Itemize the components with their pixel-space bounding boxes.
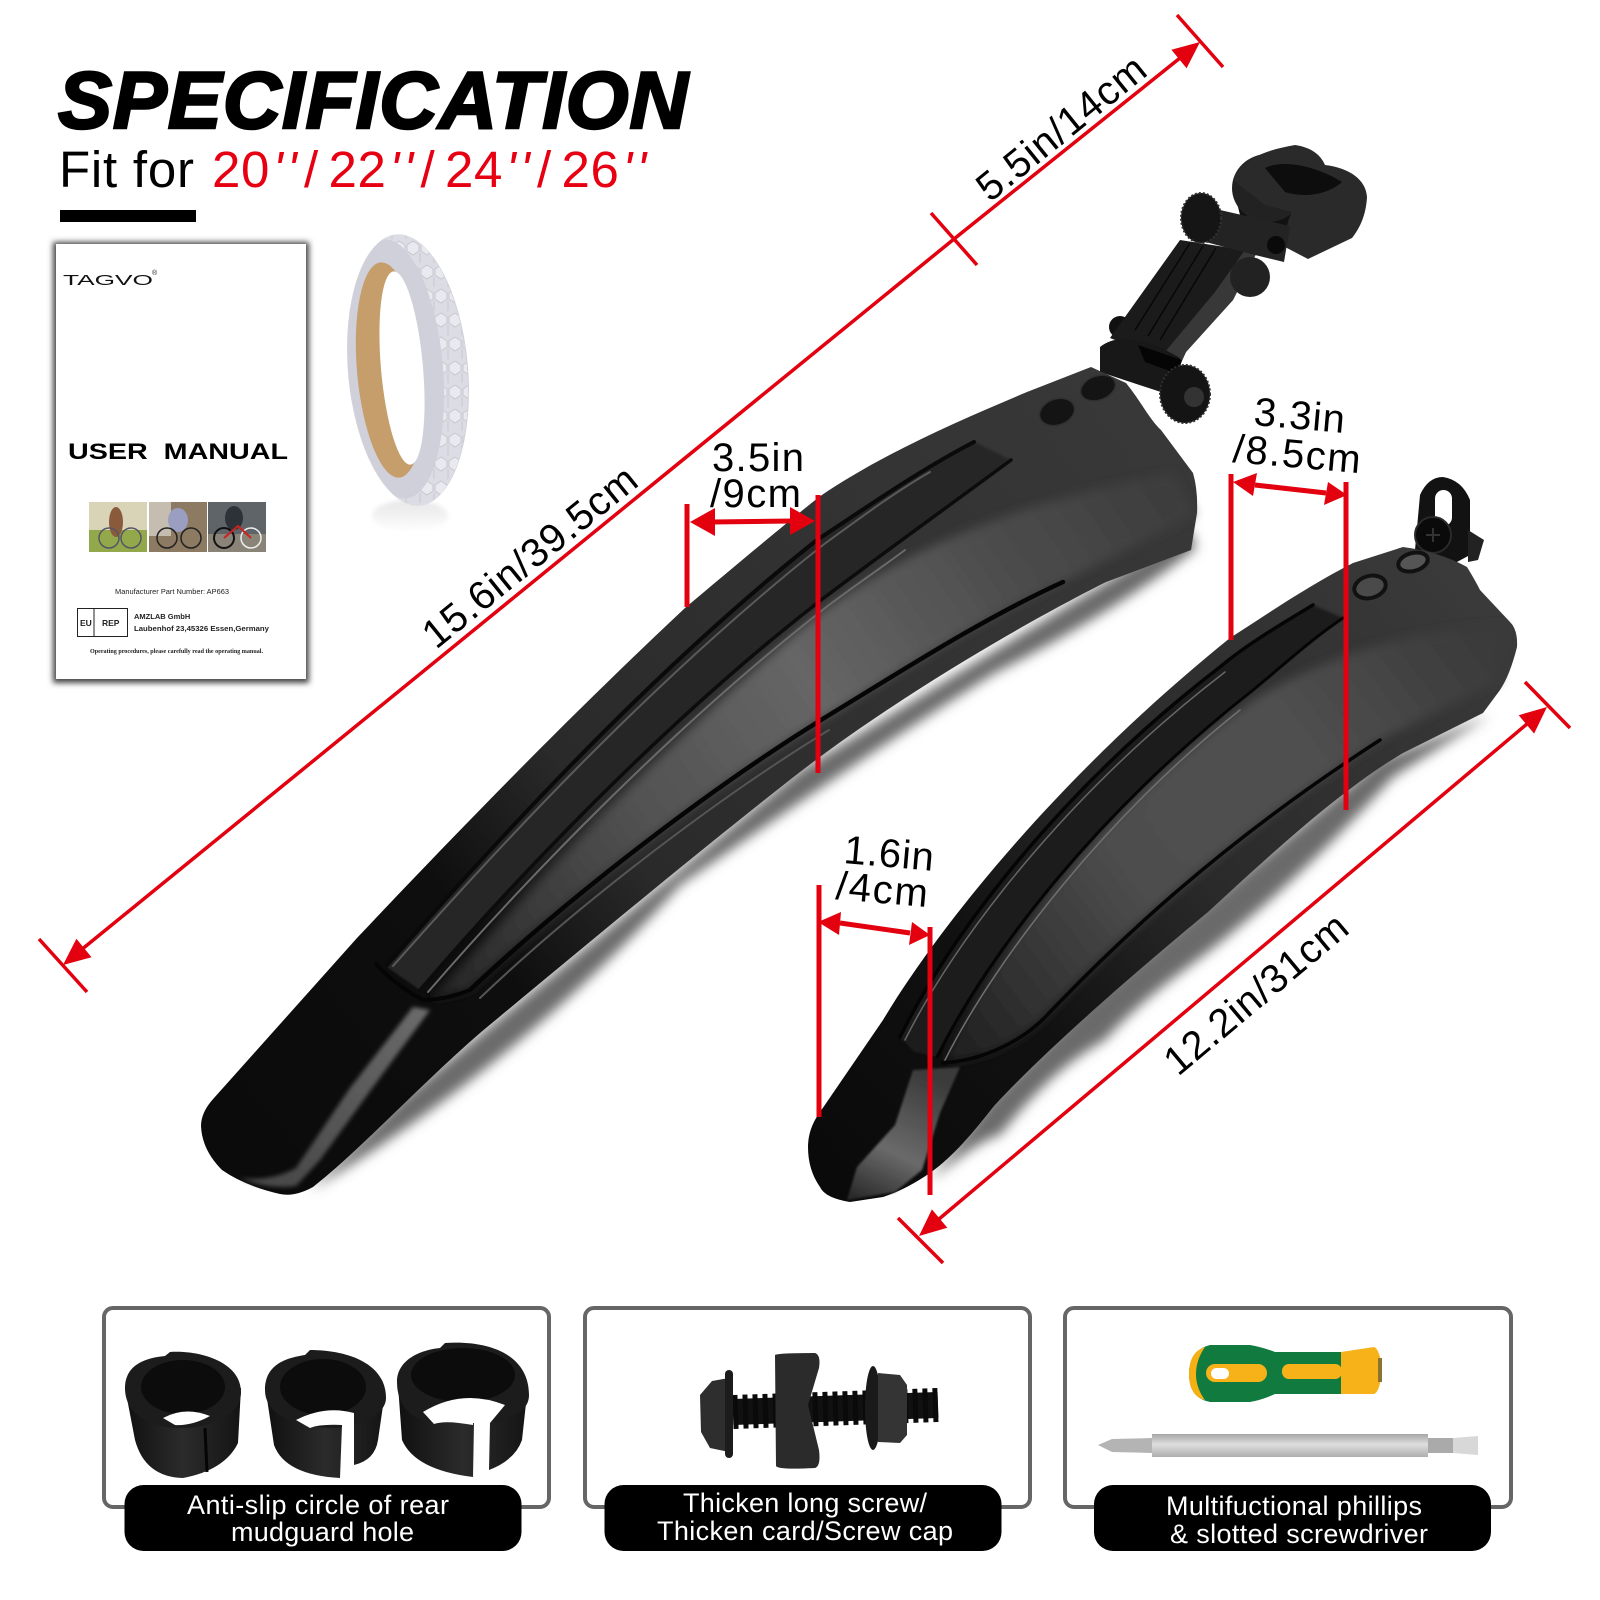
label: screwdriver <box>1094 1485 1491 1551</box>
manufacturer address <box>134 612 270 633</box>
dimension: rear bracket length <box>931 15 1223 265</box>
dimension: rear fender length: 15.6in/39.5cm <box>414 457 646 657</box>
front fender <box>808 477 1517 1202</box>
rear fender ribs <box>387 442 1063 998</box>
manufacturer address: Laubenhof 23,45326 Essen,Germany <box>134 624 270 633</box>
label: screwdriver: & slotted screwdriver <box>1170 1519 1428 1549</box>
label: anti-slip circles: Anti-slip circle of rear <box>187 1490 449 1520</box>
dimension: front fender tip width: 1.6in <box>842 828 936 880</box>
rear fender <box>201 145 1367 1195</box>
icon: reflective tape roll <box>347 234 469 522</box>
dimension: front fender length: 12.2in/31cm <box>1156 905 1357 1084</box>
front fender shadow <box>930 715 1490 1180</box>
dimension: rear bracket length: 5.5in/14cm <box>968 47 1155 210</box>
icon: anti-slip ring small <box>125 1352 241 1478</box>
dimension: front fender top width: /8.5cm <box>1231 427 1363 482</box>
rear fender screws <box>1036 371 1119 430</box>
label: anti-slip circles <box>124 1485 522 1551</box>
label: screw set <box>604 1485 1002 1551</box>
mounting arm <box>1100 145 1367 423</box>
dimension: rear fender top width <box>687 436 818 773</box>
rear fender shadow <box>310 530 1196 1190</box>
dimension: front fender tip width <box>818 828 936 1195</box>
front fender dark band <box>900 605 1343 1057</box>
manufacturer address: AMZLAB GmbH <box>134 612 190 621</box>
label: screw set: Thicken long screw/ <box>683 1488 927 1518</box>
dimension: front fender top width <box>1231 390 1363 810</box>
icon: bolt and nut <box>700 1353 938 1469</box>
rear fender tip gloss <box>240 1007 430 1187</box>
label: screwdriver: Multifuctional phillips <box>1166 1491 1422 1521</box>
icon: anti-slip ring large <box>397 1343 529 1477</box>
heading underline bar <box>60 210 196 222</box>
icon: anti-slip ring medium <box>265 1350 386 1480</box>
title: SPECIFICATION <box>58 56 690 146</box>
panel: user manual <box>53 242 309 683</box>
manual part number: Manufacturer Part Number: AP663 <box>115 587 229 596</box>
icon: screwdriver handle <box>1189 1345 1382 1402</box>
label: anti-slip circles: mudguard hole <box>231 1517 414 1547</box>
panel: screw set <box>585 1308 1030 1507</box>
dimension: rear fender top width: /9cm <box>710 472 801 516</box>
dimension: rear fender length <box>39 239 954 992</box>
manual title: USER MANUAL <box>68 439 288 464</box>
rear fender body <box>201 367 1197 1195</box>
front fender screws <box>1352 549 1430 602</box>
manual note: Operating procedures, please carefully read the operating manual. <box>90 649 263 655</box>
dimension: front fender top width: 3.3in <box>1252 390 1347 442</box>
dimension: rear fender top width: 3.5in <box>712 436 804 480</box>
EU REP box <box>78 608 128 636</box>
dimension: front fender length <box>898 682 1570 1263</box>
front fender eyelet <box>1415 477 1484 563</box>
front fender body <box>808 547 1517 1202</box>
front fender center highlight <box>945 625 1505 1062</box>
panel: user manual: ® <box>152 269 158 277</box>
rear fender tip seam <box>375 963 470 1000</box>
front fender tip gloss <box>847 1067 960 1200</box>
front fender ribs <box>900 605 1380 1063</box>
icon: screwdriver bit <box>1098 1434 1478 1457</box>
rear fender dark band <box>387 442 1011 990</box>
dimension: front fender tip width: /4cm <box>834 864 930 916</box>
EU REP box: REP <box>102 618 120 628</box>
subtitle: fit for sizes: Fit for <box>59 141 194 198</box>
manual brand: TAGVO <box>63 272 153 289</box>
subtitle: fit for sizes: 20''/22''/24''/26'' <box>212 141 648 198</box>
panel: screwdriver <box>1065 1308 1511 1507</box>
EU REP box: EU <box>80 618 92 628</box>
label: screw set: Thicken card/Screw cap <box>657 1516 953 1546</box>
panel: anti-slip circles <box>104 1308 549 1507</box>
manual photos <box>89 502 266 552</box>
rear fender center highlight <box>430 473 1195 1000</box>
